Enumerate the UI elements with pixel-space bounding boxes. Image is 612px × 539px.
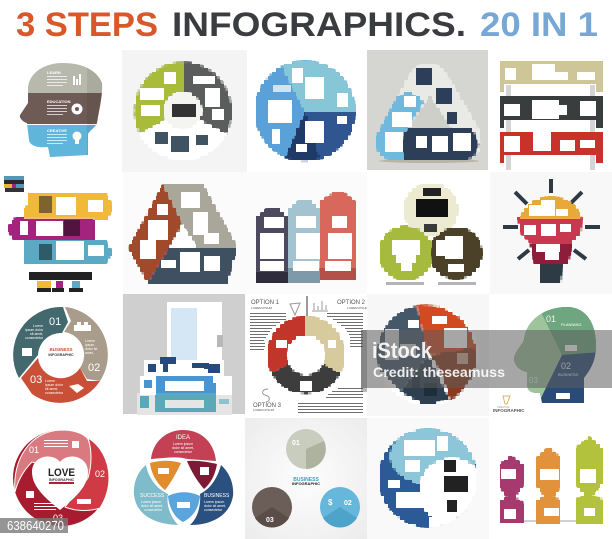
- panel: love heart circle: 03: [53, 513, 63, 523]
- panel: three separate circles: $: [328, 498, 333, 507]
- panel: circle orange slate white: [367, 294, 489, 416]
- panel: three tags: [245, 172, 367, 294]
- panel: two tone head: 02: [561, 361, 571, 371]
- panel: three arrow circle business infographic: Lorem: [33, 324, 43, 328]
- panel: option ring: [245, 294, 369, 416]
- panel: three arrow circle business infographic: sit amet,: [45, 387, 58, 391]
- icon: door: [167, 302, 223, 364]
- panel: three arrow circle business infographic: 02: [88, 362, 100, 374]
- panel: door and steps: [123, 294, 245, 414]
- panel: light bulb: [490, 172, 612, 294]
- panel: option ring: OPTION 2: [337, 300, 366, 306]
- panel: three arrow circle business infographic: dolor sit: [85, 347, 97, 351]
- panel: two tone head: 03: [529, 376, 538, 385]
- title: 20 IN 1: [480, 6, 598, 44]
- panel: two tone head: INFOGRAPHIC: [493, 408, 525, 413]
- title: 3 STEPS: [16, 6, 158, 44]
- panel: three horizontal ribbons: [499, 62, 602, 170]
- panel: three arrow circle business infographic: ipsum: [85, 343, 94, 347]
- panel: two tone head: CREATIVE: [497, 406, 510, 409]
- panel: three overlapping petals venn: consectetur: [204, 508, 223, 512]
- panel: three separate circles: 03: [266, 517, 274, 524]
- panel: three overlapping petals venn: Lorem ipsum: [204, 500, 224, 504]
- panel: love heart circle: [13, 430, 109, 526]
- panel: three overlapping petals venn: dolor sit amet,: [204, 504, 226, 508]
- title: INFOGRAPHICS.: [172, 6, 466, 44]
- panel: three arrow circle business infographic: 03: [30, 374, 42, 386]
- watermark band: [361, 330, 612, 388]
- icon: rays: [503, 179, 600, 259]
- panel: three separate circles: BUSINESS: [293, 477, 319, 483]
- panel: three arrow circle business infographic: sit amet,: [30, 332, 43, 336]
- panel: three arrow circle business infographic: Lorem: [85, 339, 95, 343]
- panel: head with three layers: [20, 63, 102, 157]
- panel: yin yang circle: [380, 428, 476, 528]
- panel: three overlapping petals venn: dolor sit amet,: [141, 504, 163, 508]
- panel: option ring: OPTION 1: [251, 300, 280, 306]
- panel: three hourglass columns: [489, 418, 612, 539]
- panel: two tone head: [493, 307, 596, 412]
- panel: three arrow circle business infographic: ipsum dolor: [25, 328, 44, 332]
- panel: three overlapping petals venn: dolor sit amet,: [172, 446, 194, 450]
- panel: three circle venn: [367, 172, 489, 294]
- watermark band: iStock: [372, 338, 433, 363]
- panel: three overlapping petals venn: Lorem ipsum: [173, 442, 193, 446]
- panel: love heart circle: INFOGRAPHIC: [49, 478, 75, 482]
- panel: three arrow circle business infographic: ipsum dolor: [45, 383, 64, 387]
- panel: three arrow circle business infographic: 01: [49, 316, 61, 328]
- panel: love heart circle: 01: [29, 445, 39, 455]
- stock number tag: 638640270: [7, 518, 64, 533]
- panel: option ring: LOREM IPSUM: [253, 408, 275, 412]
- panel: three separate circles: [245, 418, 367, 539]
- panel: three arrow circle business infographic: BUSINESS: [49, 347, 73, 352]
- panel: stacked bars yellow purple teal: [3, 176, 111, 291]
- panel: love heart circle: 02: [95, 469, 105, 479]
- panel: head with three layers: LEARN: [47, 70, 61, 75]
- panel: three overlapping petals venn: [134, 430, 233, 525]
- panel: hexagon triangle ring: [123, 172, 245, 294]
- panel: three arrow circle business infographic: consectetur: [45, 391, 64, 395]
- icon: option symbols: [263, 301, 328, 402]
- panel: head with three layers: EDUCATION: [47, 99, 71, 104]
- panel: two tone head: 01: [546, 314, 556, 324]
- panel: two tone head: PLANNING: [561, 322, 581, 327]
- panel: three arrow circle business infographic: consectetur: [25, 336, 44, 340]
- panel: three arrow circle business infographic: INFOGRAPHIC: [48, 353, 74, 357]
- watermark band: Credit: theseamuss: [373, 364, 505, 380]
- panel: three arrow circle business infographic: [13, 307, 108, 403]
- panel: three overlapping petals venn: BUSINESS: [204, 493, 230, 499]
- panel: three overlapping petals venn: IDEA: [176, 435, 190, 441]
- panel: three separate circles: INFOGRAPHIC: [292, 481, 320, 486]
- panel: option ring: LOREM IPSUM: [251, 306, 273, 310]
- panel: three arrow circle business infographic: amet,: [85, 351, 94, 355]
- panel: circle blue segments: [255, 61, 355, 161]
- panel: three separate circles: 02: [344, 500, 352, 507]
- panel: three overlapping petals venn: SUCCESS: [140, 493, 165, 499]
- panel: option ring: LOREM IPSUM: [347, 306, 369, 310]
- title: [16, 6, 598, 44]
- panel: three overlapping petals venn: consectetur: [144, 508, 163, 512]
- panel: three overlapping petals venn: consectetur: [174, 450, 193, 454]
- text block: option columns: [250, 313, 363, 413]
- panel: option ring: OPTION 3: [253, 403, 282, 409]
- panel: three arrow circle business infographic: Lorem: [45, 379, 55, 383]
- panel: three separate circles: 01: [292, 440, 300, 447]
- panel: triangle ring on gray: [367, 50, 488, 170]
- panel: three overlapping petals venn: Lorem ipsum: [141, 500, 161, 504]
- panel: two tone head: BUSINESS: [558, 372, 579, 377]
- panel: love heart circle: LOVE: [48, 467, 75, 479]
- panel: circle green gray white: [122, 50, 247, 172]
- panel: head with three layers: CREATIVE: [47, 128, 67, 133]
